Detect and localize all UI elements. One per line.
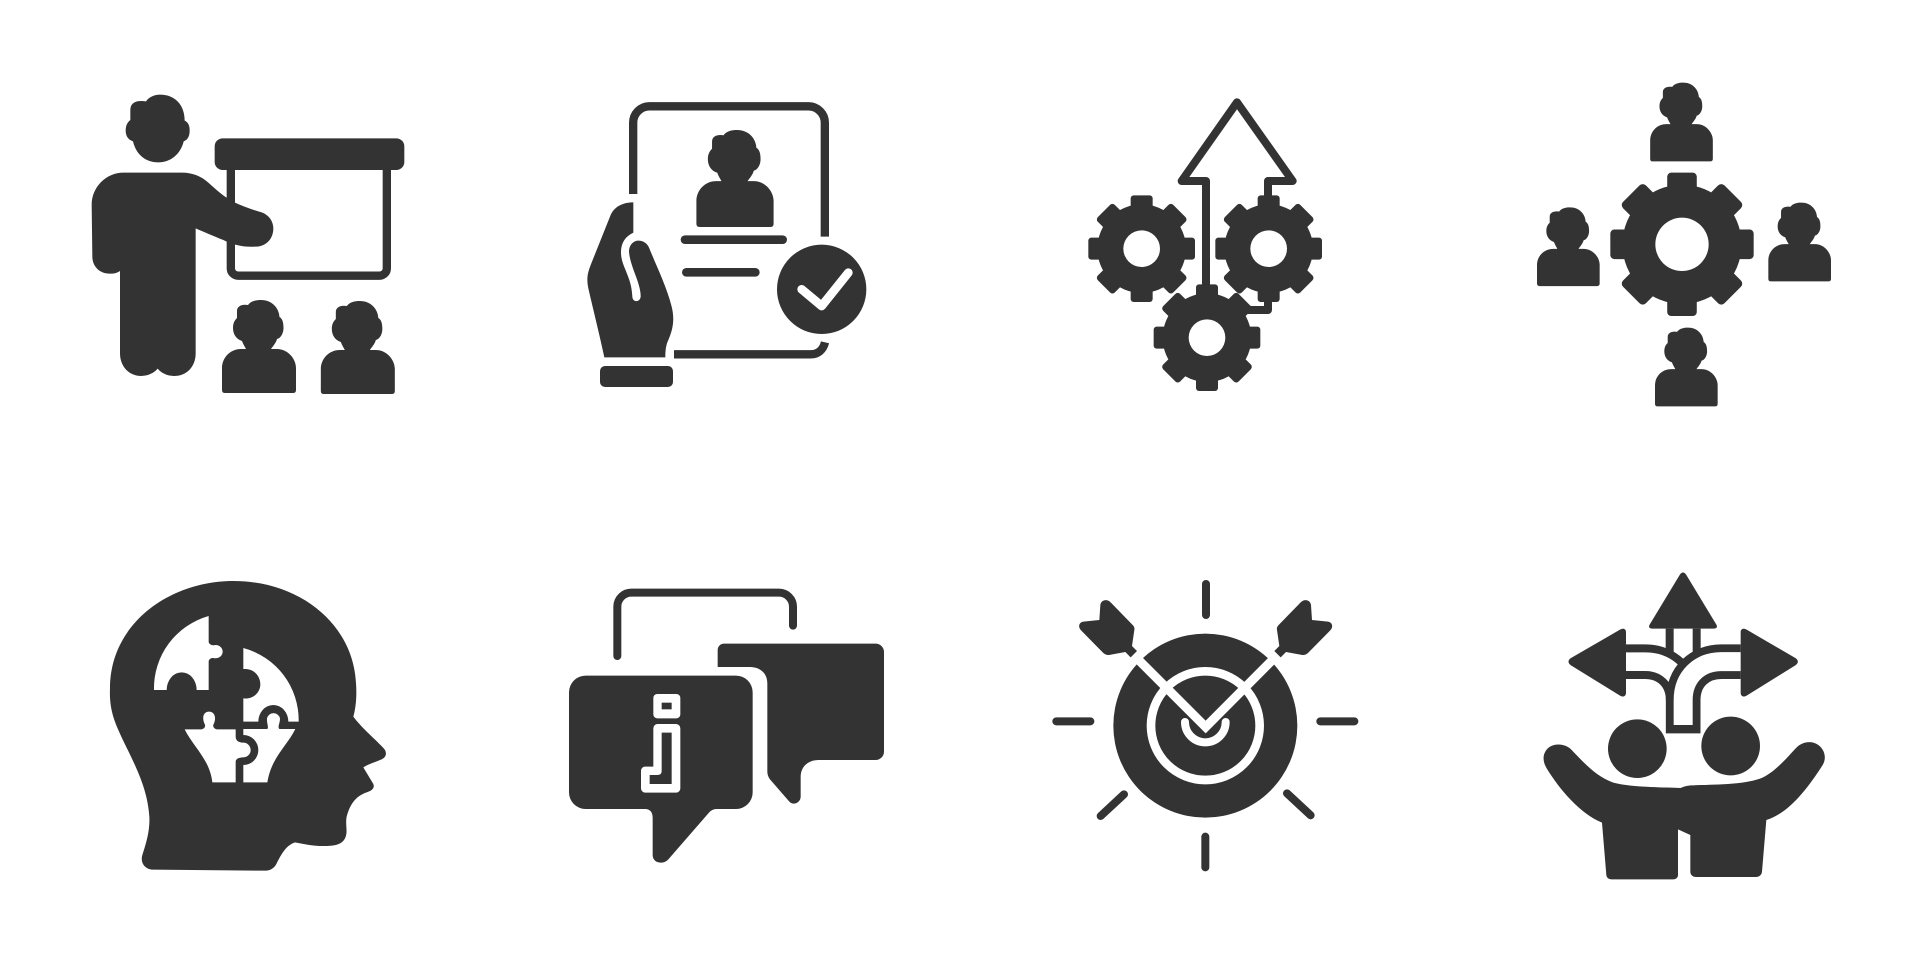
bottom gear	[1154, 284, 1260, 391]
hand	[587, 202, 673, 357]
check badge	[777, 245, 866, 334]
central gear	[1610, 173, 1754, 316]
head silhouette	[110, 581, 386, 871]
audience member right	[321, 301, 395, 394]
icon: two people at a three-way crossroads	[1544, 572, 1825, 879]
projection screen	[215, 138, 404, 276]
arrowhead up	[1649, 572, 1717, 629]
outline bubble top	[617, 593, 793, 656]
person heads	[1608, 717, 1760, 778]
front bubble	[569, 676, 753, 863]
puzzle pieces	[154, 616, 299, 782]
document frame	[633, 106, 825, 354]
crossroad paths	[1623, 627, 1743, 733]
upward arrow outline	[1182, 102, 1293, 310]
rays	[1056, 584, 1354, 867]
icon: three gears with upward arrow	[1088, 102, 1322, 391]
target disc	[1113, 634, 1297, 818]
information symbol	[641, 694, 680, 793]
embracing bodies	[1544, 742, 1825, 879]
profile portrait	[696, 130, 774, 227]
arrowhead left	[1568, 629, 1626, 697]
person right	[1768, 203, 1831, 281]
icon: information speech bubbles	[569, 593, 884, 863]
presenter body	[92, 173, 273, 376]
icon: target with two darts	[1056, 584, 1354, 867]
icon: hand holding approved profile document	[587, 106, 866, 387]
icon: team around a central gear	[1537, 83, 1831, 406]
audience member left	[222, 300, 296, 393]
icon: presenter at a screen with audience	[92, 95, 404, 394]
text lines	[681, 235, 787, 277]
target ring and dart shafts	[1135, 656, 1276, 780]
person bottom	[1655, 328, 1718, 406]
presenter head	[126, 95, 190, 162]
left gear	[1088, 195, 1195, 302]
dart fletching left	[1079, 600, 1137, 657]
cuff	[600, 366, 673, 387]
person left	[1537, 207, 1600, 286]
icon: head with puzzle pieces	[110, 581, 386, 871]
arrowhead right	[1741, 629, 1798, 697]
right gear	[1215, 195, 1322, 302]
back bubble	[718, 644, 884, 804]
person top	[1650, 83, 1713, 161]
dart fletching right	[1274, 600, 1332, 657]
